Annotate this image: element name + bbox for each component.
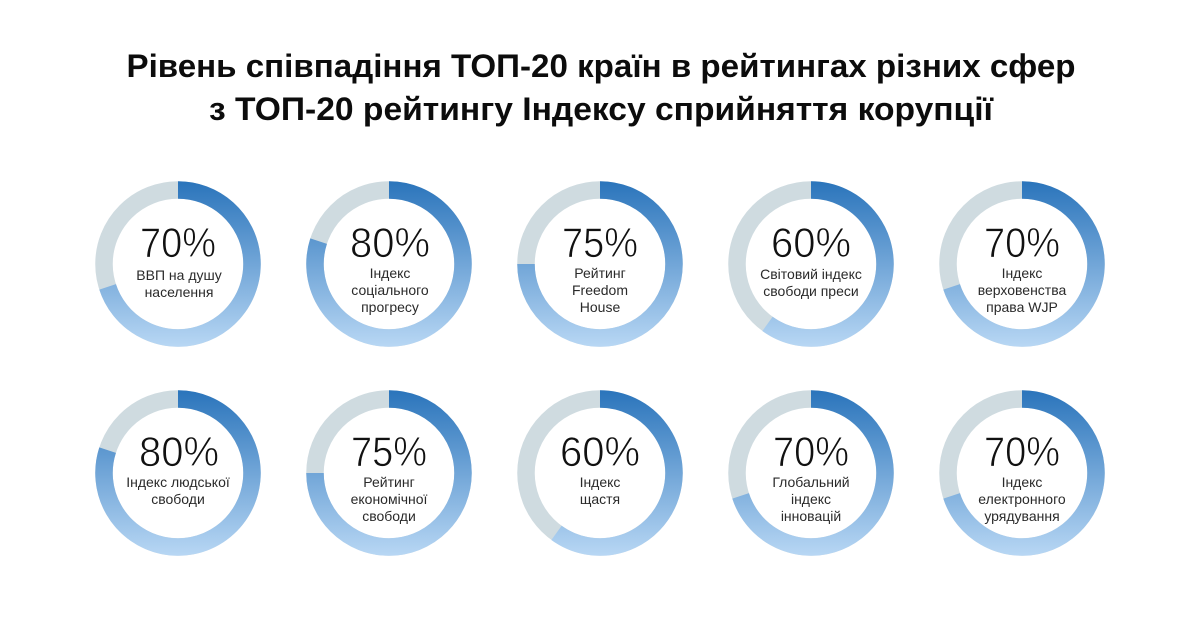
- donut: Рейтинг економічної свободи 75%: економічної: [351, 491, 428, 507]
- donut: ВВП на душу населення 70%: ВВП на душу: [136, 267, 222, 283]
- donut: Рейтинг економічної свободи 75%: Рейтинг: [363, 474, 415, 490]
- donut: Світовий індекс свободи преси 60%: свободи преси: [763, 283, 859, 299]
- donut: Рейтинг економічної свободи 75%: свободи: [362, 508, 416, 524]
- donut: Світовий індекс свободи преси 60%: 60%: [771, 219, 851, 266]
- donut: Глобальний індекс інновацій 70%: інновацій: [781, 508, 841, 524]
- donut: Індекс верховенства права WJP 70%: [948, 190, 1096, 338]
- donut: Індекс верховенства права WJP 70%: Індекс: [1002, 265, 1042, 281]
- donut: Рейтинг Freedom House 75%: Рейтинг: [574, 265, 626, 281]
- donut: Індекс електронного урядування 70%: [948, 399, 1096, 547]
- donut: Індекс верховенства права WJP 70%: 70%: [984, 219, 1060, 266]
- donut: Глобальний індекс інновацій 70%: [737, 399, 885, 547]
- donut: Індекс верховенства права WJP 70%: верховенства: [978, 282, 1067, 298]
- donut: Рейтинг економічної свободи 75%: 75%: [351, 428, 427, 475]
- donut: Індекс електронного урядування 70%: Індекс: [1002, 474, 1042, 490]
- donut: Індекс щастя 60%: [526, 399, 674, 547]
- donut: Рейтинг Freedom House 75%: House: [580, 299, 620, 315]
- donut: Світовий індекс свободи преси 60%: [737, 190, 885, 338]
- donut: Індекс соціального прогресу 80%: соціального: [351, 282, 429, 298]
- donut: Індекс соціального прогресу 80%: 80%: [350, 219, 430, 266]
- donut: Індекс людської свободи 80%: свободи: [151, 491, 205, 507]
- donut: Індекс щастя 60%: Індекс: [580, 474, 620, 490]
- donut: Індекс електронного урядування 70%: урядування: [984, 508, 1060, 524]
- donut: Світовий індекс свободи преси 60%: Світовий індекс: [760, 266, 862, 282]
- donut: Індекс соціального прогресу 80%: Індекс: [370, 265, 410, 281]
- donut: Індекс щастя 60%: щастя: [580, 491, 620, 507]
- donut: Індекс верховенства права WJP 70%: права WJP: [986, 299, 1058, 315]
- donut: Рейтинг Freedom House 75%: 75%: [562, 219, 638, 266]
- donut: Глобальний індекс інновацій 70%: 70%: [773, 428, 849, 475]
- donut: Рейтинг економічної свободи 75%: [315, 399, 463, 547]
- donut: Індекс соціального прогресу 80%: [315, 190, 463, 338]
- donut: Рейтинг Freedom House 75%: Freedom: [572, 282, 628, 298]
- donut: Індекс людської свободи 80%: 80%: [139, 428, 219, 475]
- title: [126, 48, 1076, 127]
- donut: ВВП на душу населення 70%: [104, 190, 252, 338]
- donut: ВВП на душу населення 70%: населення: [145, 284, 213, 300]
- donut: Індекс щастя 60%: 60%: [560, 428, 640, 475]
- donut: Глобальний індекс інновацій 70%: Глобальний: [772, 474, 850, 490]
- donut: Індекс людської свободи 80%: Індекс людської: [126, 474, 230, 490]
- donut: ВВП на душу населення 70%: 70%: [140, 219, 216, 266]
- title: Рівень співпадіння ТОП-20 країн в рейтингах різних сфер: [126, 48, 1076, 84]
- donut: Глобальний індекс інновацій 70%: індекс: [791, 491, 831, 507]
- donut: Індекс електронного урядування 70%: 70%: [984, 428, 1060, 475]
- title: з ТОП-20 рейтингу Індексу сприйняття корупції: [209, 91, 994, 127]
- donut: Індекс соціального прогресу 80%: прогресу: [361, 299, 419, 315]
- donut: Індекс електронного урядування 70%: електронного: [978, 491, 1066, 507]
- donut: Рейтинг Freedom House 75%: [526, 190, 674, 338]
- donut: Індекс людської свободи 80%: [104, 399, 252, 547]
